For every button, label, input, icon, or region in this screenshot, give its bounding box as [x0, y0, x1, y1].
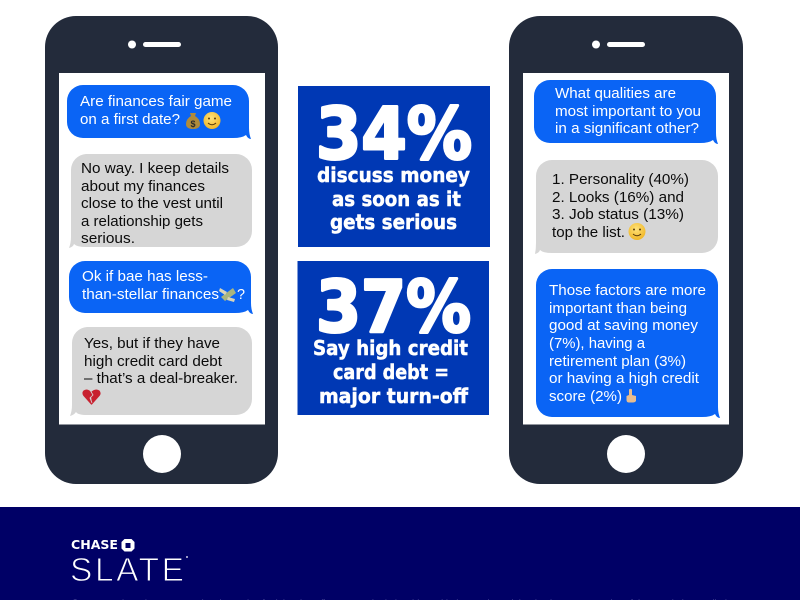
- icon: broken heart: [82, 389, 101, 405]
- stat box: 34%: 34%: [316, 92, 472, 176]
- bubble: top qualities list: 2. Looks (16%) and: [552, 190, 684, 206]
- bubble: factors comparison: or having a high credit: [549, 371, 699, 387]
- left phone home button: [143, 435, 181, 473]
- bubble: deal-breaker: high credit card debt: [84, 354, 222, 370]
- bubble: keep details close to the vest: close to the vest until: [81, 196, 223, 212]
- Chase wordmark: CHASE: [71, 538, 118, 552]
- stat box: 34%: [298, 86, 490, 247]
- Slate wordmark: SLATE: [70, 552, 184, 589]
- bubble: factors comparison: good at saving money: [549, 318, 699, 334]
- icon: pointing finger: [626, 389, 636, 402]
- bubble: less-than-stellar finances: Ok if bae has less-: [82, 269, 208, 285]
- icon: money bag: [186, 113, 200, 129]
- right phone camera: [592, 40, 600, 48]
- stat box: 37%: Say high credit: [313, 336, 468, 360]
- bubble: keep details close to the vest: a relationship gets: [81, 214, 203, 230]
- bubble: keep details close to the vest: about my finances: [81, 179, 205, 195]
- icon: Chase octagon: [122, 539, 134, 552]
- right phone screen: [523, 73, 729, 424]
- bubble: qualities question: in a significant other?: [555, 121, 699, 137]
- footer banner: [0, 507, 800, 600]
- stat box: 37%: [298, 261, 489, 415]
- bubble: factors comparison: Those factors are more: [549, 283, 706, 299]
- bubble: less-than-stellar finances: [69, 261, 253, 314]
- bubble: keep details close to the vest: serious.: [81, 231, 135, 247]
- right phone speaker: [607, 42, 645, 47]
- stat box: 34%: discuss money: [317, 163, 470, 187]
- bubble: top qualities list: top the list.: [552, 225, 625, 241]
- bubble: top qualities list: 1. Personality (40%): [552, 172, 689, 188]
- stat box: 37%: 37%: [316, 266, 471, 348]
- bubble: deal-breaker: Yes, but if they have: [84, 336, 220, 352]
- bubble: first date question: Are finances fair game: [80, 94, 232, 110]
- bubble: factors comparison: score (2%): [549, 389, 622, 405]
- stat box: 34%: as soon as it: [332, 187, 461, 211]
- bubble: less-than-stellar finances: ?: [237, 287, 245, 303]
- registered mark: [186, 556, 188, 558]
- bubble: keep details close to the vest: No way. I keep details: [81, 161, 229, 177]
- bubble: keep details close to the vest: [69, 154, 252, 248]
- bubble: factors comparison: retirement plan (3%): [549, 354, 686, 370]
- bubble: first date question: on a first date?: [80, 112, 180, 128]
- bubble: less-than-stellar finances: than-stellar finances: [82, 287, 219, 303]
- right phone home button: [607, 435, 645, 473]
- stat box: 37%: card debt =: [333, 360, 449, 384]
- right phone: [509, 16, 743, 484]
- bubble: deal-breaker: [70, 327, 252, 416]
- icon: money with wings: [219, 288, 236, 302]
- left phone camera: [128, 40, 136, 48]
- left phone screen: [59, 73, 265, 424]
- bubble: qualities question: What qualities are: [555, 86, 676, 102]
- bubble: deal-breaker: – that’s a deal-breaker.: [84, 371, 238, 387]
- bubble: qualities question: most important to you: [555, 104, 701, 120]
- bubble: qualities question: [534, 80, 718, 144]
- bubble: factors comparison: [536, 269, 720, 418]
- left phone speaker: [143, 42, 181, 47]
- bubble: first date question: [67, 85, 251, 139]
- icon: smiley: [628, 223, 646, 240]
- bubble: top qualities list: 3. Job status (13%): [552, 207, 684, 223]
- stat box: 37%: major turn-off: [319, 384, 469, 408]
- stat box: 34%: gets serious: [330, 210, 457, 234]
- bubble: factors comparison: important than being: [549, 301, 687, 317]
- icon: money bag: $: [190, 119, 196, 129]
- bubble: factors comparison: (7%), having a: [549, 336, 645, 352]
- bubble: top qualities list: [535, 160, 718, 254]
- icon: smiley: [204, 112, 220, 129]
- left phone: [45, 16, 278, 484]
